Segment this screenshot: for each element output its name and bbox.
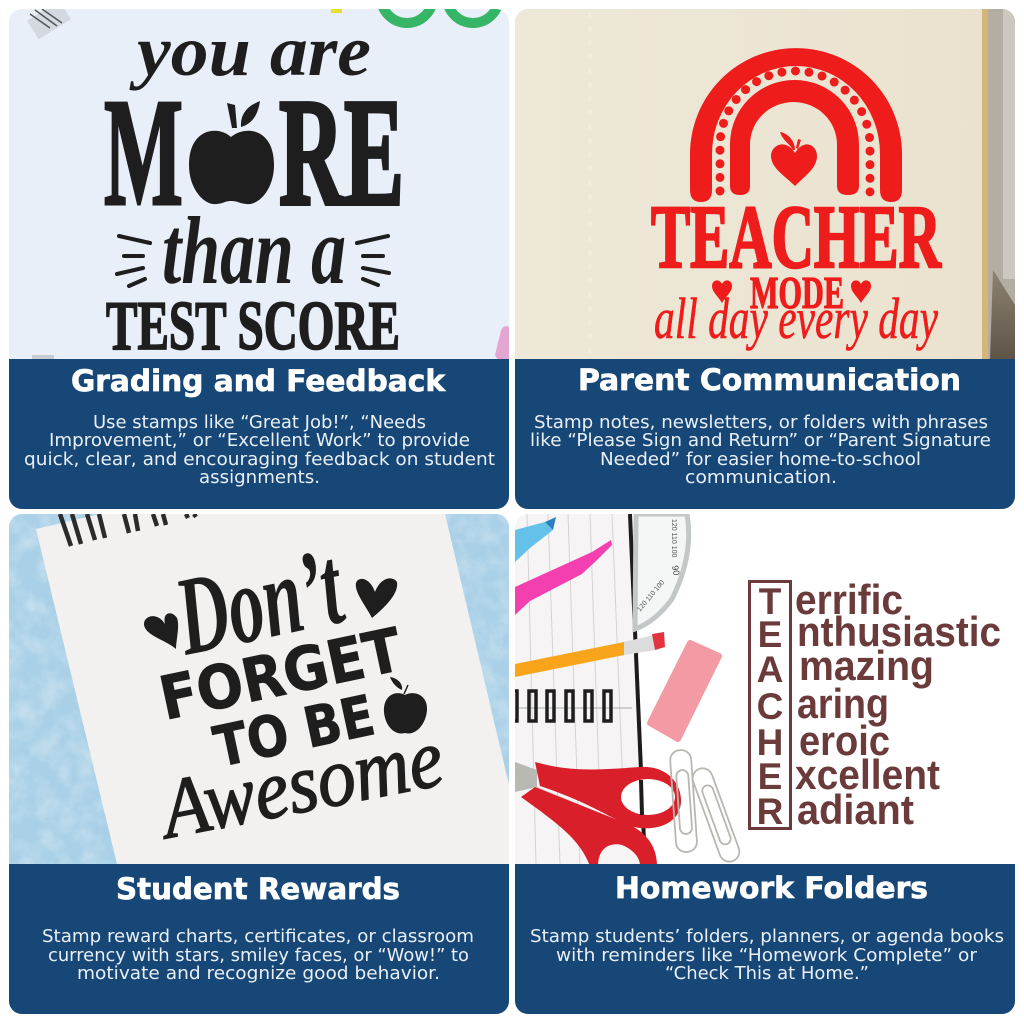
stamp: don't forget to be awesome: TO BE — [208, 683, 380, 781]
protractor: 90 — [670, 565, 682, 576]
heading: Homework Folders — [615, 871, 928, 905]
acrostic letters: T — [759, 581, 782, 622]
acrostic words: nthusiastic — [797, 608, 1001, 655]
stamp: you are more than a test score: M — [104, 68, 183, 238]
stamp: don't forget to be awesome: FORGET — [154, 615, 408, 735]
acrostic letters: R — [757, 791, 783, 832]
protractor — [635, 514, 689, 629]
spiral rings — [512, 691, 611, 721]
heading: Parent Communication — [578, 363, 961, 397]
acrostic letters: A — [757, 649, 783, 690]
icon: apple — [384, 677, 427, 734]
description: Needed” for easier home-to-school — [600, 449, 921, 470]
caption panel: Grading and Feedback — [9, 359, 509, 509]
description: quick, clear, and encouraging feedback on student — [24, 449, 495, 470]
stamp: teacher acrostic — [750, 576, 1001, 833]
panel: Homework Folders — [512, 514, 1015, 1014]
stamp: don't forget to be awesome: Don’t — [165, 523, 354, 680]
panel: Grading and Feedback — [9, 0, 522, 509]
description: Stamp notes, newsletters, or folders with phrases — [534, 412, 988, 433]
description: like “Please Sign and Return” or “Parent Signature — [530, 430, 991, 451]
description: motivate and recognize good behavior. — [77, 963, 440, 984]
acrostic words: aring — [797, 680, 889, 727]
description: assignments. — [199, 467, 320, 488]
description: “Check This at Home.” — [665, 963, 869, 984]
caption panel: Student Rewards — [9, 864, 509, 1014]
acrostic words: adiant — [797, 786, 914, 833]
description: Improvement,” or “Excellent Work” to provide — [49, 430, 470, 451]
acrostic letters — [758, 588, 782, 824]
stamp: you are more than a test score: RE — [279, 68, 404, 238]
protractor: 120 110 100 — [670, 519, 677, 558]
acrostic box — [750, 582, 790, 828]
notebook page — [515, 514, 646, 864]
stamp: you are more than a test score: you are — [129, 11, 371, 91]
acrostic letters: C — [757, 686, 783, 727]
paper clips — [670, 749, 742, 864]
acrostic words: xcellent — [795, 751, 940, 798]
photo props: blue texture and notebook — [9, 514, 510, 864]
pink highlighter — [515, 540, 612, 615]
scissors — [515, 762, 681, 866]
acrostic words: eroic — [799, 717, 890, 764]
description: communication. — [685, 467, 837, 488]
acrostic letters: E — [758, 756, 782, 797]
acrostic words: mazing — [799, 642, 934, 689]
heading: Student Rewards — [116, 872, 400, 906]
photo: school supplies — [512, 514, 742, 866]
caption panel: Homework Folders — [515, 864, 1015, 1014]
photo props: paper and fabric — [982, 9, 1015, 359]
icon: right heart — [356, 578, 397, 618]
description — [530, 926, 1004, 984]
description: currency with stars, smiley faces, or “Wow!” to — [48, 945, 469, 966]
description: Use stamps like “Great Job!”, “Needs — [93, 412, 426, 433]
description — [42, 926, 474, 984]
stamp: teacher mode rainbow — [651, 48, 942, 351]
stamp: you are more than a test score: TEST SCORE — [106, 288, 400, 365]
stamp: don't forget to be awesome: Awesome — [149, 711, 450, 858]
panel: Student Rewards — [9, 514, 510, 1014]
stamp: teacher mode rainbow: MODE — [750, 267, 844, 318]
panel: Parent Communication — [515, 9, 1015, 509]
outer rainbow band — [690, 48, 902, 202]
pencil — [515, 632, 665, 677]
inner rainbow band — [730, 80, 859, 195]
stamp: you are more than a test score — [104, 40, 401, 350]
photo props: desk items — [27, 0, 522, 363]
description: Stamp reward charts, certificates, or classroom — [42, 926, 474, 947]
stamp: you are more than a test score: than a — [162, 197, 346, 304]
description: with reminders like “Homework Complete” or — [556, 945, 978, 966]
acrostic letters: E — [758, 614, 782, 655]
acrostic words — [795, 576, 1001, 833]
dotted rainbow band — [720, 71, 870, 200]
heading: Grading and Feedback — [71, 364, 446, 398]
description: Stamp students’ folders, planners, or agenda books — [530, 926, 1004, 947]
caption panel: Parent Communication — [515, 359, 1015, 509]
acrostic words: errific — [795, 576, 903, 623]
description — [530, 412, 991, 488]
eraser — [650, 643, 719, 739]
icon: left heart — [144, 613, 178, 649]
icon: heart apple — [771, 132, 817, 186]
acrostic letters: H — [757, 722, 783, 763]
description — [24, 412, 495, 488]
stamp: don't forget to be awesome — [144, 553, 442, 840]
blue marker — [515, 517, 556, 562]
protractor: 120 110 100 — [636, 579, 666, 613]
